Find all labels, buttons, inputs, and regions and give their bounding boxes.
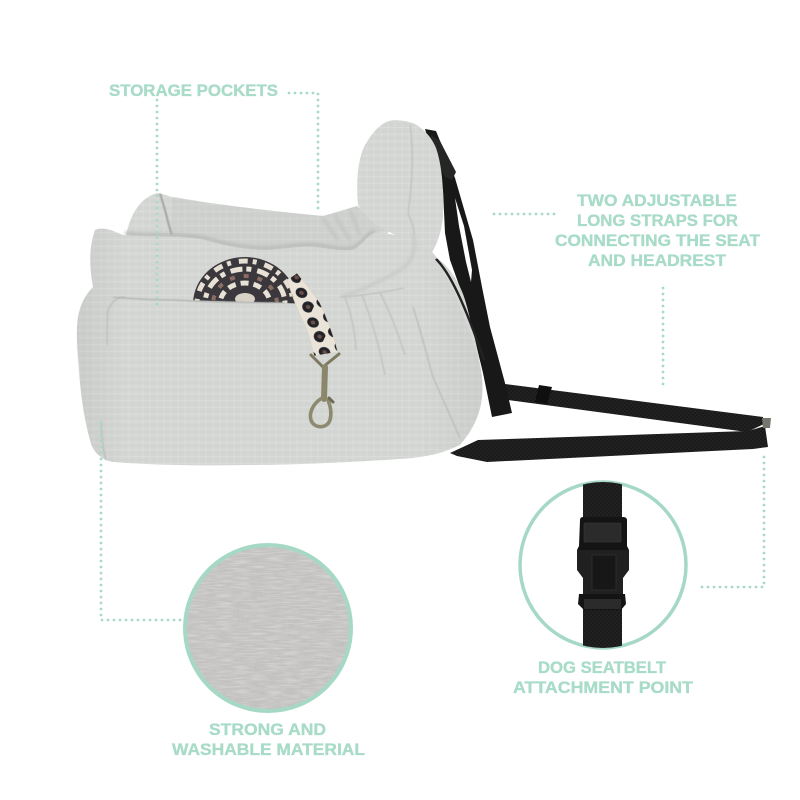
strap gap <box>455 198 472 282</box>
label: adjustable straps: CONNECTING THE SEAT <box>555 231 761 250</box>
leash strap <box>287 273 338 356</box>
body right side <box>320 254 483 458</box>
connector: storage pockets to front pocket <box>156 100 158 306</box>
rim fold <box>342 233 415 297</box>
material swatch circle <box>183 543 353 713</box>
rim shadow <box>125 231 375 249</box>
buckle ring <box>520 482 686 648</box>
buckle webbing <box>583 480 622 650</box>
label: material: STRONG AND <box>209 720 326 739</box>
pocket top seam <box>113 297 285 303</box>
label: adjustable straps: AND HEADREST <box>588 251 727 270</box>
buckle centre plate <box>592 555 616 590</box>
label: adjustable straps: TWO ADJUSTABLE <box>577 191 737 210</box>
back cushion fold <box>160 194 172 235</box>
horizontal strap <box>505 384 764 432</box>
back cushion <box>126 193 390 270</box>
buckle bottom part <box>578 594 626 610</box>
right gathers <box>340 288 405 375</box>
buckle top part <box>577 517 629 550</box>
swatch ring <box>185 545 351 711</box>
label: adjustable straps <box>555 191 761 270</box>
left body seam <box>101 420 106 460</box>
connector: strap end to buckle circle <box>697 457 764 587</box>
strap end buckle <box>762 418 771 428</box>
strap slider <box>535 385 552 404</box>
label: material <box>172 720 365 759</box>
label: storage pockets: STORAGE POCKETS <box>109 81 278 100</box>
rear strap <box>425 129 512 417</box>
connector: straps label to upper strap <box>494 213 560 215</box>
connector: material circle to seat <box>101 423 182 620</box>
label: adjustable straps: LONG STRAPS FOR <box>577 211 738 230</box>
leash clasp <box>310 354 339 427</box>
label: seatbelt attachment <box>513 658 694 697</box>
back cushion tone <box>170 198 385 250</box>
swatch texture <box>183 543 353 713</box>
leash coil <box>193 257 295 304</box>
headrest seam <box>408 125 414 236</box>
label: seatbelt attachment: ATTACHMENT POINT <box>513 678 694 697</box>
buckle bottom slot <box>584 599 621 609</box>
connector: straps label to horizontal strap <box>662 288 664 386</box>
label: material: WASHABLE MATERIAL <box>172 740 365 759</box>
buckle detail circle <box>520 480 686 650</box>
back cushion folds right <box>322 210 360 240</box>
label: seatbelt attachment: DOG SEATBELT <box>538 658 667 677</box>
product: dog car seat <box>77 120 771 465</box>
side seam <box>413 307 460 438</box>
inner side strap <box>435 258 484 360</box>
lower strap <box>450 426 768 462</box>
buckle body <box>577 550 629 594</box>
buckle top slot <box>584 523 621 542</box>
connector: storage pockets to back pocket <box>289 93 318 212</box>
main body <box>77 229 462 465</box>
strap clip <box>431 135 456 180</box>
pocket <box>107 297 285 345</box>
body shading <box>77 229 483 465</box>
pocket left seam <box>107 297 125 345</box>
headrest <box>357 120 443 258</box>
